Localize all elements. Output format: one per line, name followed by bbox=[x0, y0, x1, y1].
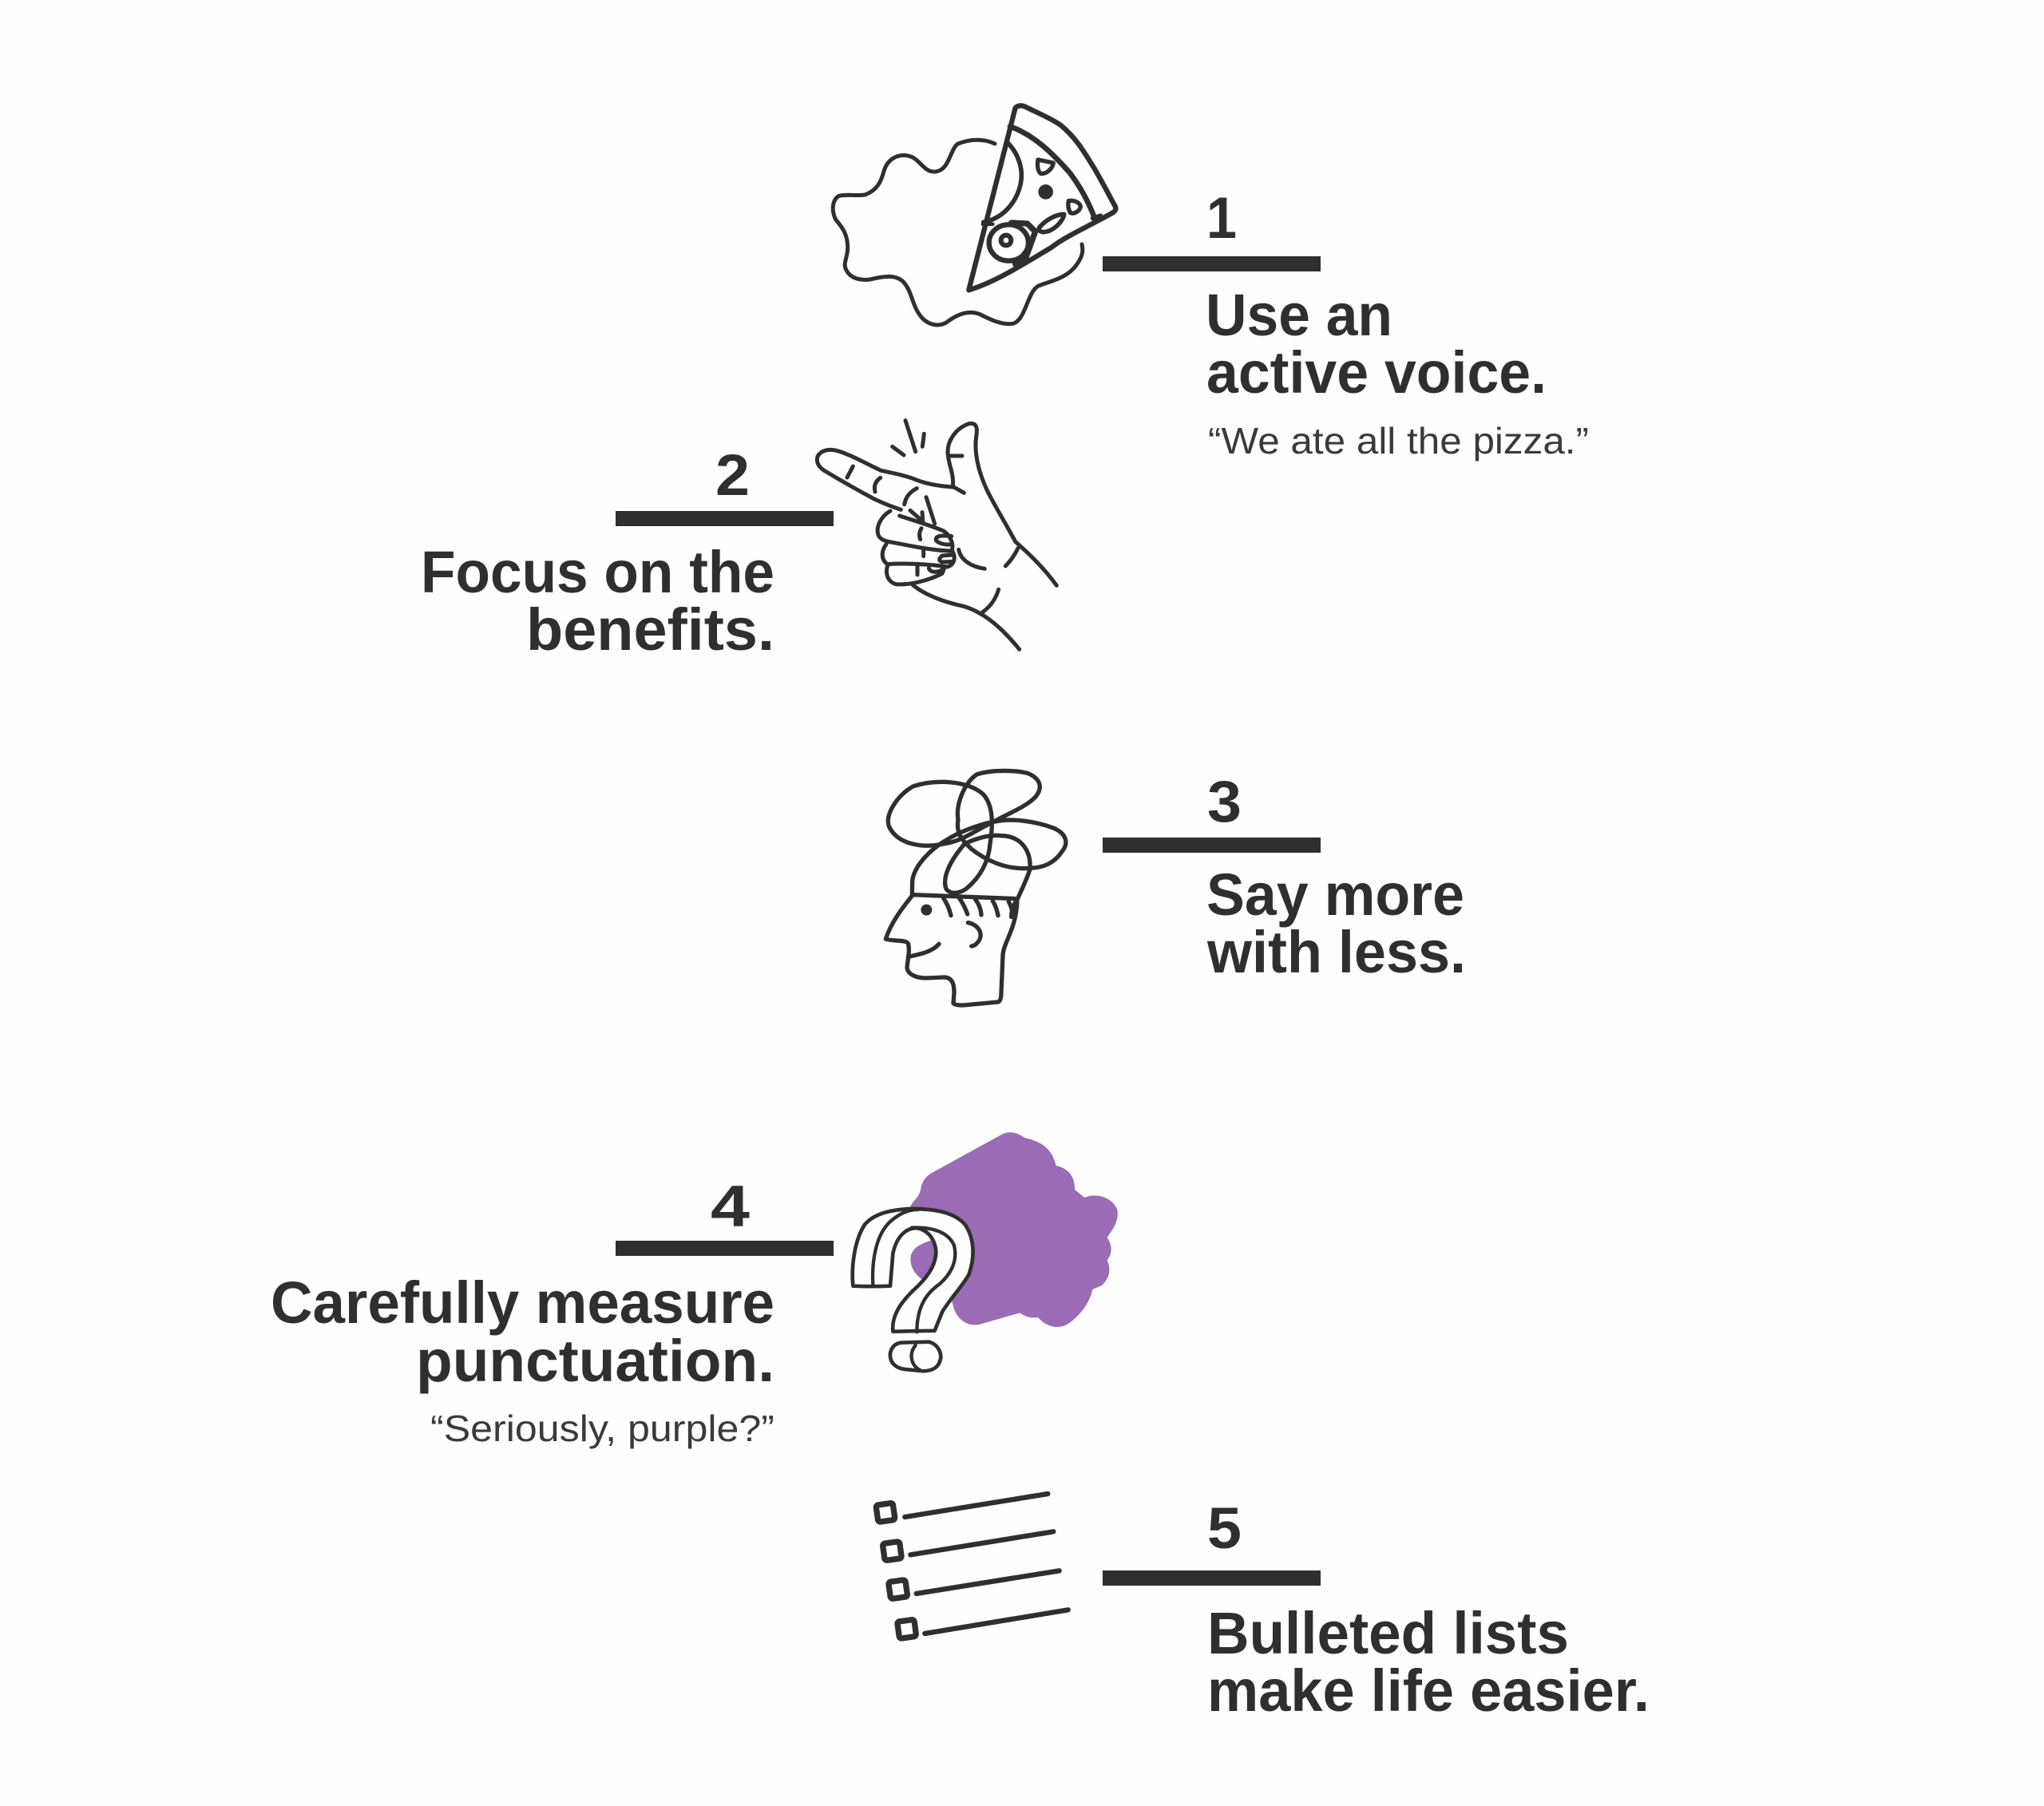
number 3: 3 bbox=[1207, 770, 1242, 834]
quote 4: “Seriously, purple?” bbox=[430, 1408, 774, 1449]
icon: pizza slice with wavy outline bbox=[833, 105, 1115, 325]
icon: pointing hand bbox=[817, 421, 1056, 649]
heading 3: Say more bbox=[1206, 861, 1464, 928]
heading 5: make life easier. bbox=[1207, 1657, 1650, 1724]
panel: tip 1 bbox=[833, 105, 1589, 461]
icon: bulleted checklist bbox=[876, 1494, 1068, 1638]
quote 1: “We ate all the pizza.” bbox=[1208, 420, 1589, 461]
panel: tip 2 bbox=[421, 421, 1056, 663]
heading 2: benefits. bbox=[526, 596, 774, 663]
heading 4: punctuation. bbox=[416, 1328, 774, 1394]
panel: tip 3 bbox=[885, 770, 1466, 1005]
icon: head with tangled thoughts bbox=[885, 770, 1066, 1005]
heading 5: Bulleted lists bbox=[1207, 1600, 1569, 1666]
divider bar 4 bbox=[616, 1241, 834, 1256]
number 5: 5 bbox=[1207, 1496, 1242, 1561]
heading 3: with less. bbox=[1206, 919, 1466, 985]
number 2: 2 bbox=[715, 443, 750, 508]
heading 2: Focus on the bbox=[421, 539, 774, 605]
heading 1: Use an bbox=[1206, 282, 1392, 348]
divider bar 1 bbox=[1103, 256, 1321, 271]
icon: question mark on purple blob bbox=[853, 1132, 1118, 1371]
number 4: 4 bbox=[711, 1174, 750, 1239]
number 1: 1 bbox=[1206, 186, 1237, 251]
panel: tip 5 bbox=[876, 1494, 1650, 1724]
divider bar 5 bbox=[1103, 1570, 1321, 1586]
divider bar 3 bbox=[1103, 838, 1321, 853]
panel: tip 4 bbox=[271, 1132, 1118, 1449]
heading 1: active voice. bbox=[1206, 339, 1547, 406]
divider bar 2 bbox=[616, 511, 834, 526]
heading 4: Carefully measure bbox=[271, 1269, 774, 1336]
